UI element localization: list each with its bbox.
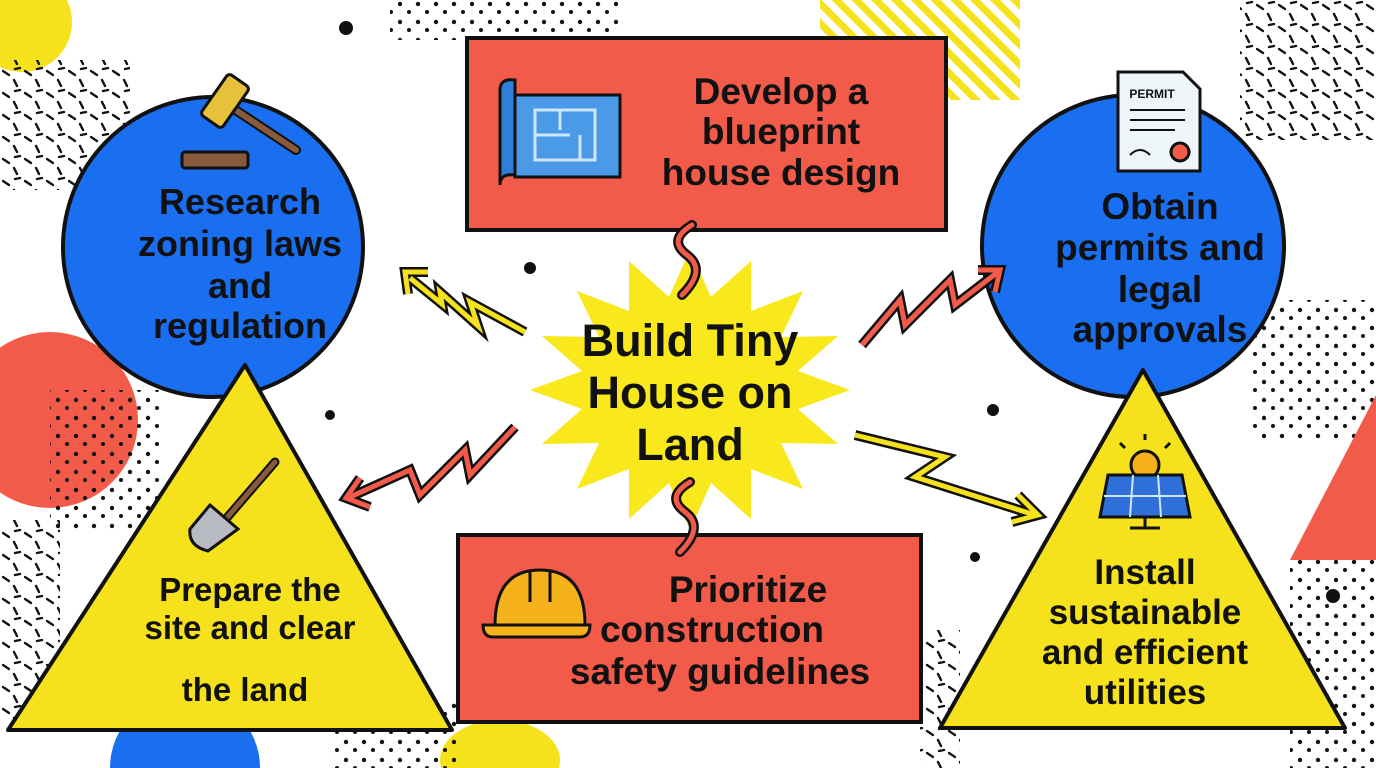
arrow: to utilities bbox=[855, 435, 1038, 522]
icon: blueprint bbox=[500, 80, 620, 185]
panel: permits circle: legal bbox=[1118, 269, 1202, 310]
icon: gavel bbox=[182, 73, 296, 168]
panel: research zoning circle: regulation bbox=[153, 305, 327, 346]
panel: safety rect bbox=[458, 535, 921, 722]
panel: utilities triangle: sustainable bbox=[1049, 593, 1241, 632]
panel: safety rect: safety guidelines bbox=[570, 651, 870, 692]
panel: safety rect: construction bbox=[600, 609, 824, 650]
icon: shovel bbox=[190, 462, 275, 551]
panel: research zoning circle: zoning laws bbox=[138, 223, 342, 264]
center star: House on bbox=[587, 367, 793, 418]
arrow: squiggle top bbox=[678, 225, 696, 295]
panel: permits circle: Obtain bbox=[1101, 186, 1219, 227]
panel: utilities triangle: Install bbox=[1094, 553, 1196, 592]
panel: research zoning circle bbox=[63, 73, 363, 397]
arrow: to research bbox=[405, 272, 525, 332]
panel: prepare site triangle bbox=[8, 365, 452, 730]
icon: solar panel bbox=[1100, 434, 1190, 528]
center star: Land bbox=[636, 419, 744, 470]
panel: safety rect: Prioritize bbox=[669, 569, 827, 610]
panel: blueprint rect bbox=[467, 38, 946, 230]
panel: utilities triangle: and efficient bbox=[1042, 633, 1248, 672]
arrow: squiggle bottom bbox=[676, 482, 694, 552]
panel: utilities triangle bbox=[940, 370, 1345, 728]
panel: blueprint rect: house design bbox=[662, 152, 900, 193]
panel: prepare site triangle: the land bbox=[182, 671, 308, 708]
arrow: to permits bbox=[862, 270, 1000, 345]
icon: permit document: PERMIT bbox=[1129, 87, 1175, 101]
panel: blueprint rect: blueprint bbox=[702, 111, 860, 152]
center star bbox=[530, 250, 850, 530]
panel: blueprint rect: Develop a bbox=[694, 71, 869, 112]
center star: Build Tiny bbox=[582, 315, 798, 366]
panel: prepare site triangle: site and clear bbox=[145, 609, 356, 646]
panel: permits circle bbox=[982, 72, 1284, 397]
panel: utilities triangle: utilities bbox=[1084, 673, 1206, 712]
panel: permits circle: approvals bbox=[1073, 309, 1247, 350]
icon: permit document bbox=[1118, 72, 1200, 171]
panel: research zoning circle: and bbox=[208, 265, 272, 306]
arrow: to prepare site bbox=[346, 427, 515, 507]
icon: hard hat bbox=[483, 570, 590, 637]
panel: prepare site triangle: Prepare the bbox=[159, 571, 341, 608]
panel: research zoning circle: Research bbox=[159, 181, 321, 222]
panel: permits circle: permits and bbox=[1055, 227, 1265, 268]
